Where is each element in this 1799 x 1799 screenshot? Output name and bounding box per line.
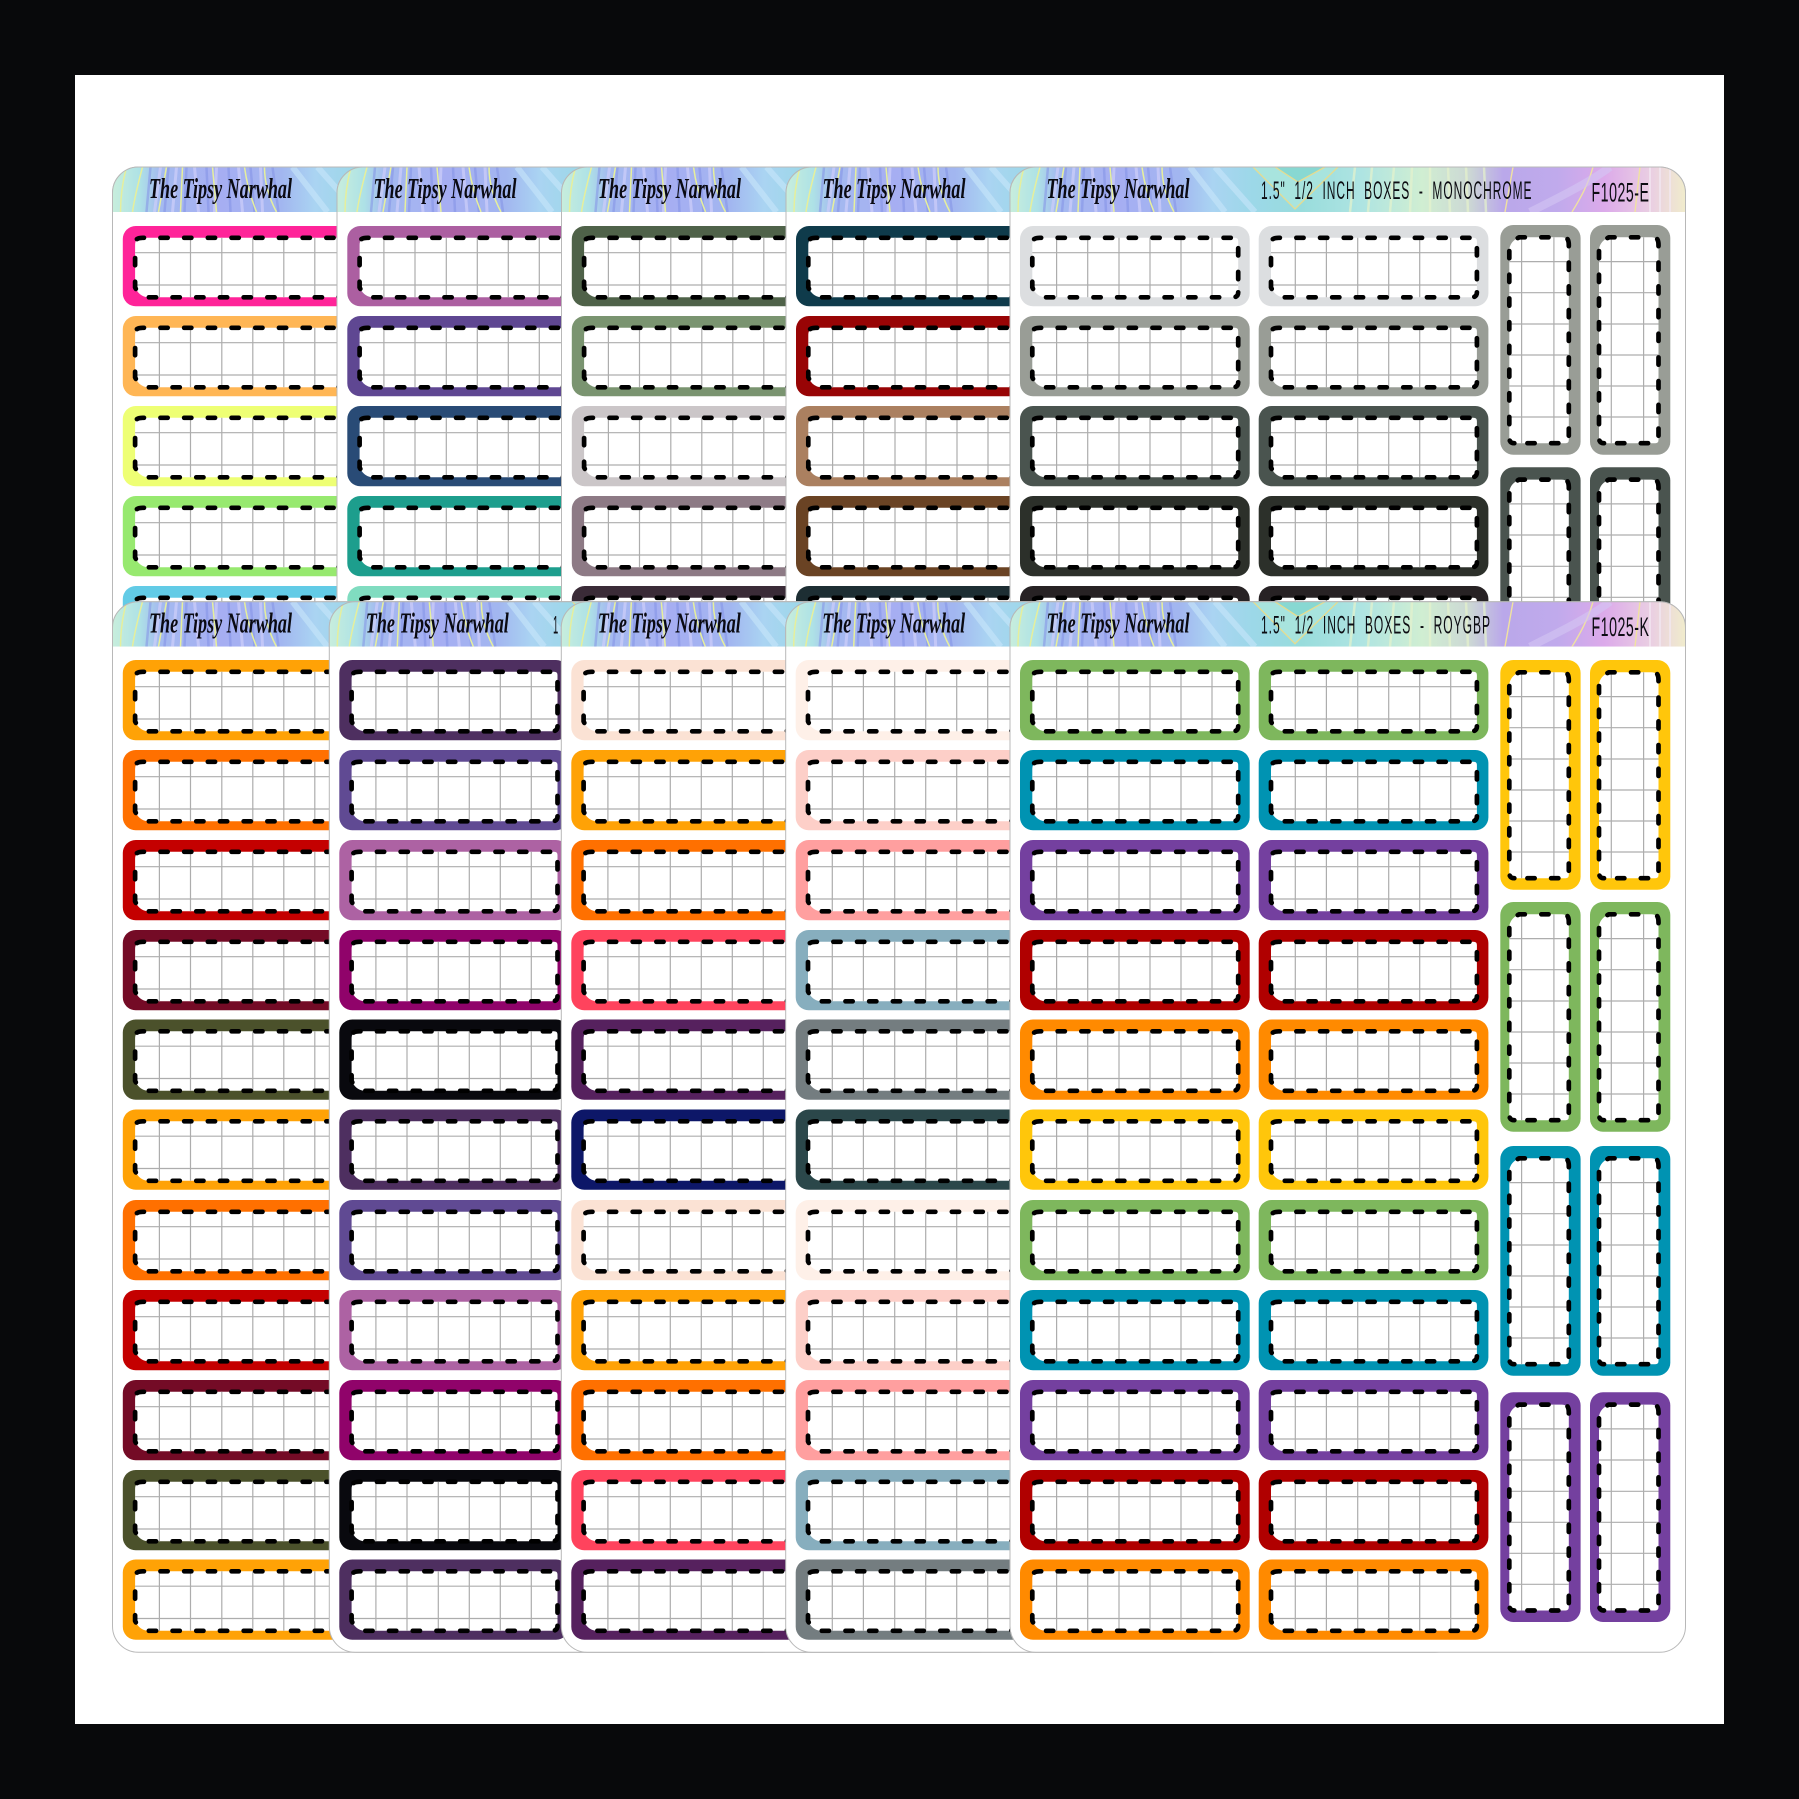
sticker: amber [123, 1110, 352, 1190]
sticker: green [1020, 1200, 1250, 1280]
sticker: steel grey [796, 1560, 1025, 1640]
sticker: teal [347, 496, 577, 576]
brand name: The Tipsy Narwhal [1046, 173, 1190, 205]
sticker: violet [339, 1200, 569, 1280]
sticker: red [1020, 1470, 1250, 1550]
sticker: blue 2 [1259, 1290, 1488, 1370]
sticker: purple [1020, 840, 1250, 920]
brand name: The Tipsy Narwhal [822, 608, 966, 640]
sticker: near black 2 [1259, 586, 1488, 666]
panel: top sheet 3 muted [562, 167, 1237, 767]
sticker: tan [796, 406, 1026, 486]
sticker: plum [339, 660, 569, 740]
panel: bottom sheet 1 autumn [112, 602, 788, 1652]
sticker: salmon [796, 840, 1025, 920]
sticker: orange 2 [1259, 1020, 1488, 1100]
vertical sticker: slate [1500, 467, 1581, 697]
sticker: steel grey [796, 1020, 1025, 1100]
sticker: slate 2 [1259, 406, 1488, 486]
product code: F1025-E [1592, 178, 1650, 208]
vertical sticker: grey [1500, 225, 1581, 455]
panel: top sheet 2 jewel [337, 167, 1012, 767]
sticker: slate [1020, 406, 1250, 486]
sticker: black [339, 1470, 569, 1550]
sticker: navy [347, 406, 577, 486]
vertical sticker: slate 2 [1590, 467, 1670, 697]
sticker: charcoal teal [796, 586, 1026, 666]
sticker: dusty blue [796, 930, 1025, 1010]
sticker: amber [123, 1560, 352, 1640]
sticker: dark teal [796, 1110, 1025, 1190]
sticker: magenta [339, 930, 569, 1010]
header band [562, 167, 1237, 212]
vertical sticker: blue 2 [1590, 1146, 1670, 1376]
sticker: purple [571, 1020, 801, 1100]
vertical sticker: purple [1500, 1392, 1581, 1622]
sticker: blue 2 [1259, 750, 1488, 830]
panel: bottom sheet 3 sunset [561, 602, 1237, 1652]
sticker: plum [339, 1110, 569, 1190]
sticker: green [1020, 660, 1250, 740]
sticker: green 2 [1259, 660, 1488, 740]
sticker: light grey 2 [1259, 226, 1488, 306]
vertical sticker: green 2 [1590, 902, 1670, 1132]
sticker: orange 2 [1259, 1560, 1488, 1640]
sticker: coral red [571, 930, 801, 1010]
sticker: light grey [1020, 226, 1250, 306]
sticker: yellow 2 [1259, 1110, 1488, 1190]
header band [561, 602, 1237, 647]
sticker: dark olive grey 2 [1259, 496, 1488, 576]
sticker: amber [123, 660, 352, 740]
vertical sticker: yellow [1500, 660, 1581, 890]
header band [786, 167, 1462, 212]
sticker: purple 2 [1259, 1380, 1488, 1460]
brand name: The Tipsy Narwhal [1046, 608, 1190, 640]
header band [112, 167, 788, 212]
sticker: amber [571, 1290, 801, 1370]
panel: bottom sheet 2 purple: 1 [553, 612, 559, 640]
vertical sticker: yellow 2 [1590, 660, 1670, 890]
sticker: peach [571, 1200, 801, 1280]
sticker: coral red [571, 1470, 801, 1550]
sticker: plum [339, 1560, 569, 1640]
sticker: salmon [796, 1380, 1025, 1460]
sticker: purple [1020, 1380, 1250, 1460]
brand name: The Tipsy Narwhal [598, 608, 741, 640]
sticker: yellow [1020, 1110, 1250, 1190]
sticker: green [123, 496, 352, 576]
brand name: The Tipsy Narwhal [149, 608, 293, 640]
sticker: sky blue [123, 586, 352, 666]
sticker: mint [347, 586, 577, 666]
sticker: green 2 [1259, 1200, 1488, 1280]
sticker: brown [796, 496, 1026, 576]
sticker: near black [1020, 586, 1250, 666]
brand name: The Tipsy Narwhal [366, 608, 509, 640]
header band [1010, 602, 1686, 647]
header band [329, 602, 1005, 647]
sticker: orange [571, 840, 801, 920]
brand name: The Tipsy Narwhal [822, 173, 966, 205]
sticker: light orange [123, 316, 352, 396]
sticker: navy [571, 1110, 801, 1190]
sticker: red 2 [1259, 1470, 1488, 1550]
brand name: The Tipsy Narwhal [598, 173, 742, 205]
panel: top sheet 4 earth [786, 167, 1462, 767]
sticker: cream [796, 660, 1025, 740]
sticker: olive [123, 1020, 352, 1100]
sticker: black [339, 1020, 569, 1100]
panel: bottom sheet 5 ROYGBP [1010, 602, 1686, 1652]
vertical sticker: green [1500, 902, 1581, 1132]
sticker: mauve [572, 496, 802, 576]
sticker: grey 2 [1259, 316, 1488, 396]
sticker: deep teal [796, 226, 1026, 306]
sticker: orange [123, 750, 352, 830]
sticker: pink [123, 226, 352, 306]
sticker: blush [796, 750, 1025, 830]
sticker: magenta [339, 1380, 569, 1460]
sticker: crimson [796, 316, 1026, 396]
sticker: aubergine [572, 586, 802, 666]
sticker: orchid [339, 1290, 569, 1370]
sticker: purple 2 [1259, 840, 1488, 920]
header band [112, 602, 788, 647]
panel: bottom sheet 5 ROYGBP: 1.5" 1/2 INCH BOXES - ROYGBP [1261, 612, 1491, 640]
brand name: The Tipsy Narwhal [374, 173, 517, 205]
sticker: yellow [123, 406, 352, 486]
sticker: orange [123, 1200, 352, 1280]
sticker: pale grey [572, 406, 802, 486]
header band [786, 602, 1461, 647]
vertical sticker: grey 2 [1590, 225, 1670, 455]
sticker: orchid [339, 840, 569, 920]
sticker: wine [123, 930, 352, 1010]
sticker: cream [796, 1200, 1025, 1280]
panel: bottom sheet 2 purple [329, 602, 1005, 1652]
sticker: orchid [347, 226, 577, 306]
vertical sticker: blue [1500, 1146, 1581, 1376]
sticker: red [123, 1290, 352, 1370]
sticker: blue [1020, 1290, 1250, 1370]
sticker: red [1020, 930, 1250, 1010]
panel: top sheet 1 neon [112, 167, 788, 767]
product code: F1025-K [1592, 612, 1650, 642]
panel: top sheet 5 monochrome [1010, 167, 1686, 767]
sticker: red 2 [1259, 930, 1488, 1010]
brand name: The Tipsy Narwhal [149, 173, 293, 205]
sticker: red [123, 840, 352, 920]
sticker: peach [571, 660, 801, 740]
vertical sticker: purple 2 [1590, 1392, 1670, 1622]
sticker: sage [572, 316, 802, 396]
sticker: orange [571, 1380, 801, 1460]
header band [337, 167, 1012, 212]
sticker: blush [796, 1290, 1025, 1370]
sticker: dark olive grey [1020, 496, 1250, 576]
sticker: blue [1020, 750, 1250, 830]
sticker: olive [123, 1470, 352, 1550]
sticker: violet [347, 316, 577, 396]
sticker: purple [571, 1560, 801, 1640]
sticker: wine [123, 1380, 352, 1460]
sticker: amber [571, 750, 801, 830]
sticker: violet [339, 750, 569, 830]
sticker: orange [1020, 1560, 1250, 1640]
sticker: orange [1020, 1020, 1250, 1100]
sticker: forest [572, 226, 802, 306]
sticker: dusty blue [796, 1470, 1025, 1550]
header band [1010, 167, 1686, 212]
panel: bottom sheet 4 pastel [786, 602, 1461, 1652]
sticker: grey [1020, 316, 1250, 396]
